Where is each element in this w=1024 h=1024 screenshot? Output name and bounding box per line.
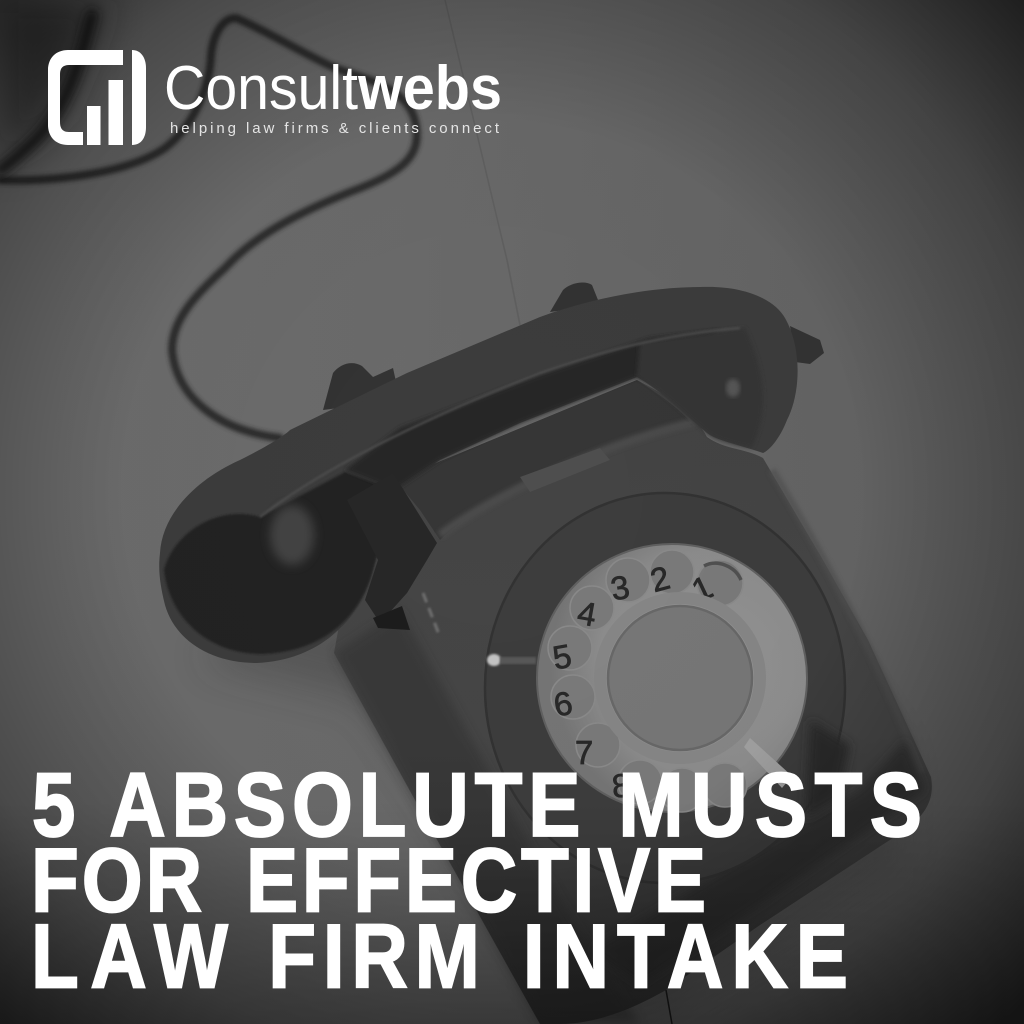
base top rim highlight — [440, 422, 695, 535]
telephone cord — [0, 15, 417, 438]
small slot — [520, 448, 610, 492]
base lower shadow — [334, 610, 640, 1024]
dial numbers — [550, 559, 718, 805]
handset — [159, 287, 798, 663]
logo — [48, 50, 502, 145]
telephone — [159, 283, 932, 1024]
inner ring — [600, 598, 760, 758]
right earpiece highlight — [726, 379, 740, 397]
logo tagline: helping law firms & clients connect — [170, 120, 500, 137]
surround reflection — [487, 654, 536, 666]
title line 2: EFFECTIVE — [246, 829, 706, 931]
cradle notch — [373, 606, 410, 630]
phone base — [334, 380, 932, 1024]
dial numbers: 2 — [646, 559, 674, 599]
dial surround ring — [485, 493, 845, 883]
dial numbers: 7 — [575, 734, 593, 771]
logo icon — [48, 50, 146, 145]
phone shadow — [200, 460, 900, 1024]
title line 1: ABSOLUTE — [109, 753, 581, 855]
title line 1: 5 — [32, 753, 75, 855]
title line 2: FOR — [31, 829, 202, 931]
rotary dial — [537, 544, 807, 812]
base right edge highlight — [772, 470, 922, 772]
base bottom right band — [590, 740, 925, 985]
dial numbers: 3 — [608, 568, 632, 607]
dial numbers: 8 — [610, 766, 632, 805]
title — [31, 753, 922, 1007]
cradle post — [347, 473, 437, 623]
right earpiece face — [637, 328, 763, 448]
title line 3: INTAKE — [523, 905, 848, 1007]
title line 3: LAW — [31, 905, 229, 1007]
dial numbers: 5 — [550, 637, 574, 676]
dial numbers: 1 — [686, 568, 718, 609]
base top panel — [395, 380, 693, 540]
dial numbers: 4 — [575, 594, 599, 633]
cradle prongs — [323, 283, 824, 410]
surround gloss — [805, 720, 850, 820]
logo wordmark: Consult — [164, 54, 358, 123]
earpiece left dark face — [164, 472, 395, 654]
earpiece highlight — [270, 505, 314, 565]
handset underside — [345, 330, 720, 490]
handset edge sheen — [260, 328, 740, 517]
finger stop — [744, 738, 792, 788]
finger holes — [548, 550, 747, 812]
cord beneath phone — [666, 990, 672, 1024]
logo wordmark: webs — [357, 54, 502, 123]
dial numbers: 6 — [551, 684, 575, 723]
hole shadow crescents — [704, 563, 741, 580]
title line 1: MUSTS — [618, 753, 922, 855]
centre disc — [608, 606, 752, 750]
left base reflections — [423, 593, 440, 637]
title line 3: FIRM — [268, 905, 480, 1007]
